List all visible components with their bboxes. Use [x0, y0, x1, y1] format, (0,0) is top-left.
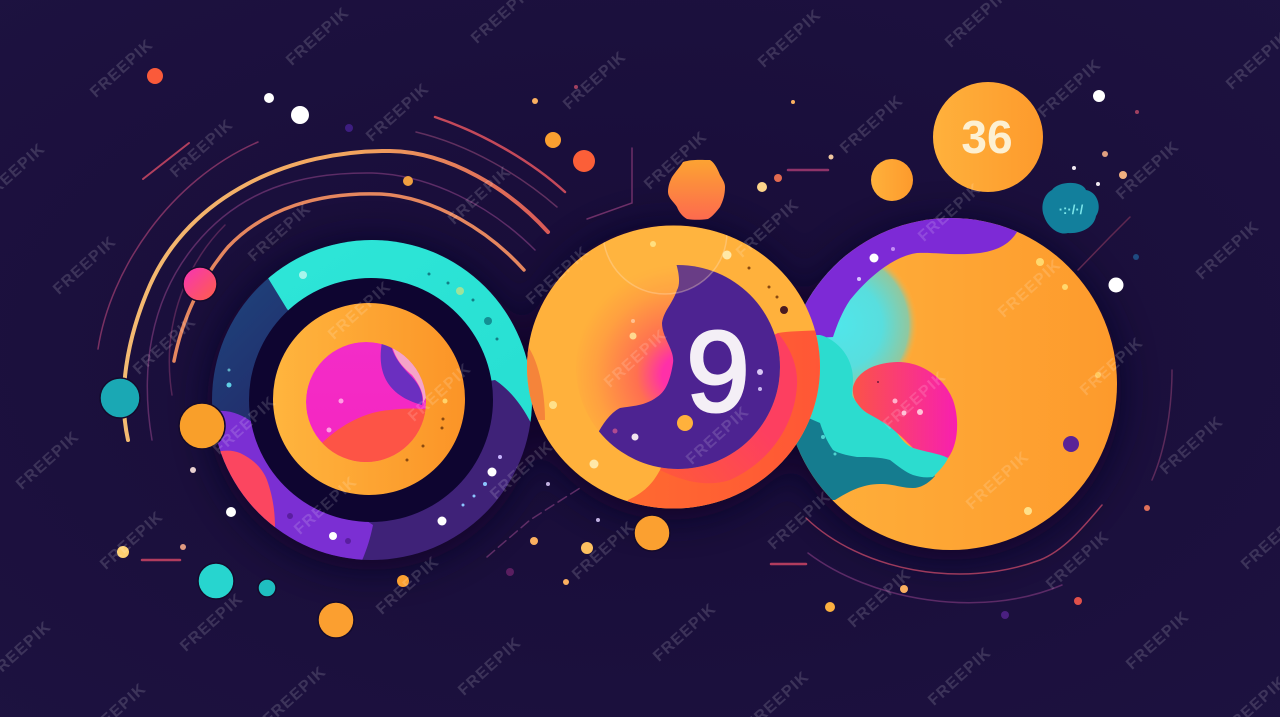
hexagon blob — [668, 160, 725, 220]
inner pink planet — [306, 342, 426, 462]
ring sparkles — [226, 271, 502, 544]
pink blob — [853, 362, 957, 458]
watermark: FREEPIK — [683, 403, 753, 468]
watermark: FREEPIK — [650, 600, 720, 665]
watermark: FREEPIK — [13, 428, 83, 493]
dark teal wave — [796, 418, 935, 500]
small orange planet — [871, 159, 913, 201]
watermark: FREEPIK — [1123, 608, 1193, 673]
watermark: FREEPIK — [455, 634, 525, 699]
red lower right — [628, 330, 820, 508]
watermark: FREEPIK — [130, 313, 200, 378]
watermark: FREEPIK — [50, 233, 120, 298]
orbit arcs upper left — [98, 117, 632, 440]
watermark: FREEPIK — [1077, 334, 1147, 399]
watermark: FREEPIK — [167, 116, 237, 181]
watermark: FREEPIK — [1035, 56, 1105, 121]
scattered dots — [117, 68, 1150, 619]
watermark: FREEPIK — [291, 473, 361, 538]
watermark: FREEPIK — [925, 644, 995, 709]
purple disc area — [598, 265, 780, 469]
inner orange circle — [273, 303, 465, 495]
watermark: FREEPIK — [373, 553, 443, 618]
ring hole — [249, 278, 493, 522]
watermark: FREEPIK — [765, 488, 835, 553]
purple crescent — [381, 342, 422, 405]
right circle dots — [821, 247, 1101, 515]
orbit planets — [100, 267, 670, 638]
watermark: FREEPIK — [1043, 528, 1113, 593]
teal cloud — [1042, 183, 1099, 234]
shadows behind circles — [207, 220, 1121, 570]
watermark: FREEPIK — [245, 200, 315, 265]
ring segment: teal — [268, 238, 534, 425]
watermark: FREEPIK — [487, 438, 557, 503]
watermark: FREEPIK — [755, 6, 825, 71]
ring segment: purple — [218, 410, 373, 560]
number 9: 9 — [686, 309, 750, 436]
circle right — [796, 218, 1117, 550]
small line accents — [142, 170, 1172, 603]
watermark: FREEPIK — [880, 368, 950, 433]
teal cloud: ·:·/·/ — [1059, 202, 1084, 217]
pink band — [660, 333, 797, 483]
watermark: FREEPIK — [405, 360, 475, 425]
watermark: FREEPIK — [325, 278, 395, 343]
watermark: FREEPIK — [995, 256, 1065, 321]
watermark: FREEPIK — [560, 48, 630, 113]
watermark: FREEPIK — [445, 163, 515, 228]
watermark: FREEPIK — [210, 393, 280, 458]
disc arc highlight — [603, 226, 728, 295]
gradient disc — [576, 265, 780, 469]
watermark: FREEPIK — [1157, 413, 1227, 478]
watermark: FREEPIK — [1113, 138, 1183, 203]
watermark: FREEPIK — [97, 508, 167, 573]
ring segment: red crescent — [215, 451, 275, 528]
watermark: FREEPIK — [1193, 218, 1263, 283]
watermark: FREEPIK — [845, 566, 915, 631]
watermark: FREEPIK — [363, 80, 433, 145]
badge: 36: 36 — [961, 111, 1013, 163]
watermark: FREEPIK — [177, 590, 247, 655]
teal wave — [810, 335, 948, 478]
watermark: FREEPIK — [641, 128, 711, 193]
badge: 36 — [933, 82, 1043, 192]
watermark: FREEPIK — [837, 92, 907, 157]
watermark: FREEPIK — [569, 518, 639, 583]
watermark: FREEPIK — [601, 326, 671, 391]
ring chart: left — [190, 238, 534, 565]
left edge sliver — [527, 347, 545, 420]
light pink highlight — [392, 348, 426, 403]
watermark: FREEPIK — [963, 448, 1033, 513]
watermark: FREEPIK — [733, 196, 803, 261]
red lower area — [322, 408, 426, 462]
purple band — [805, 218, 1017, 338]
watermark: FREEPIK — [87, 36, 157, 101]
watermark: FREEPIK — [283, 4, 353, 69]
center dots — [677, 415, 693, 431]
ring base — [212, 240, 532, 560]
inner planet dots — [326, 398, 448, 462]
teal glow — [805, 250, 916, 400]
circle center — [527, 226, 820, 508]
watermark: FREEPIK — [915, 180, 985, 245]
watermark: FREEPIK — [523, 243, 593, 308]
